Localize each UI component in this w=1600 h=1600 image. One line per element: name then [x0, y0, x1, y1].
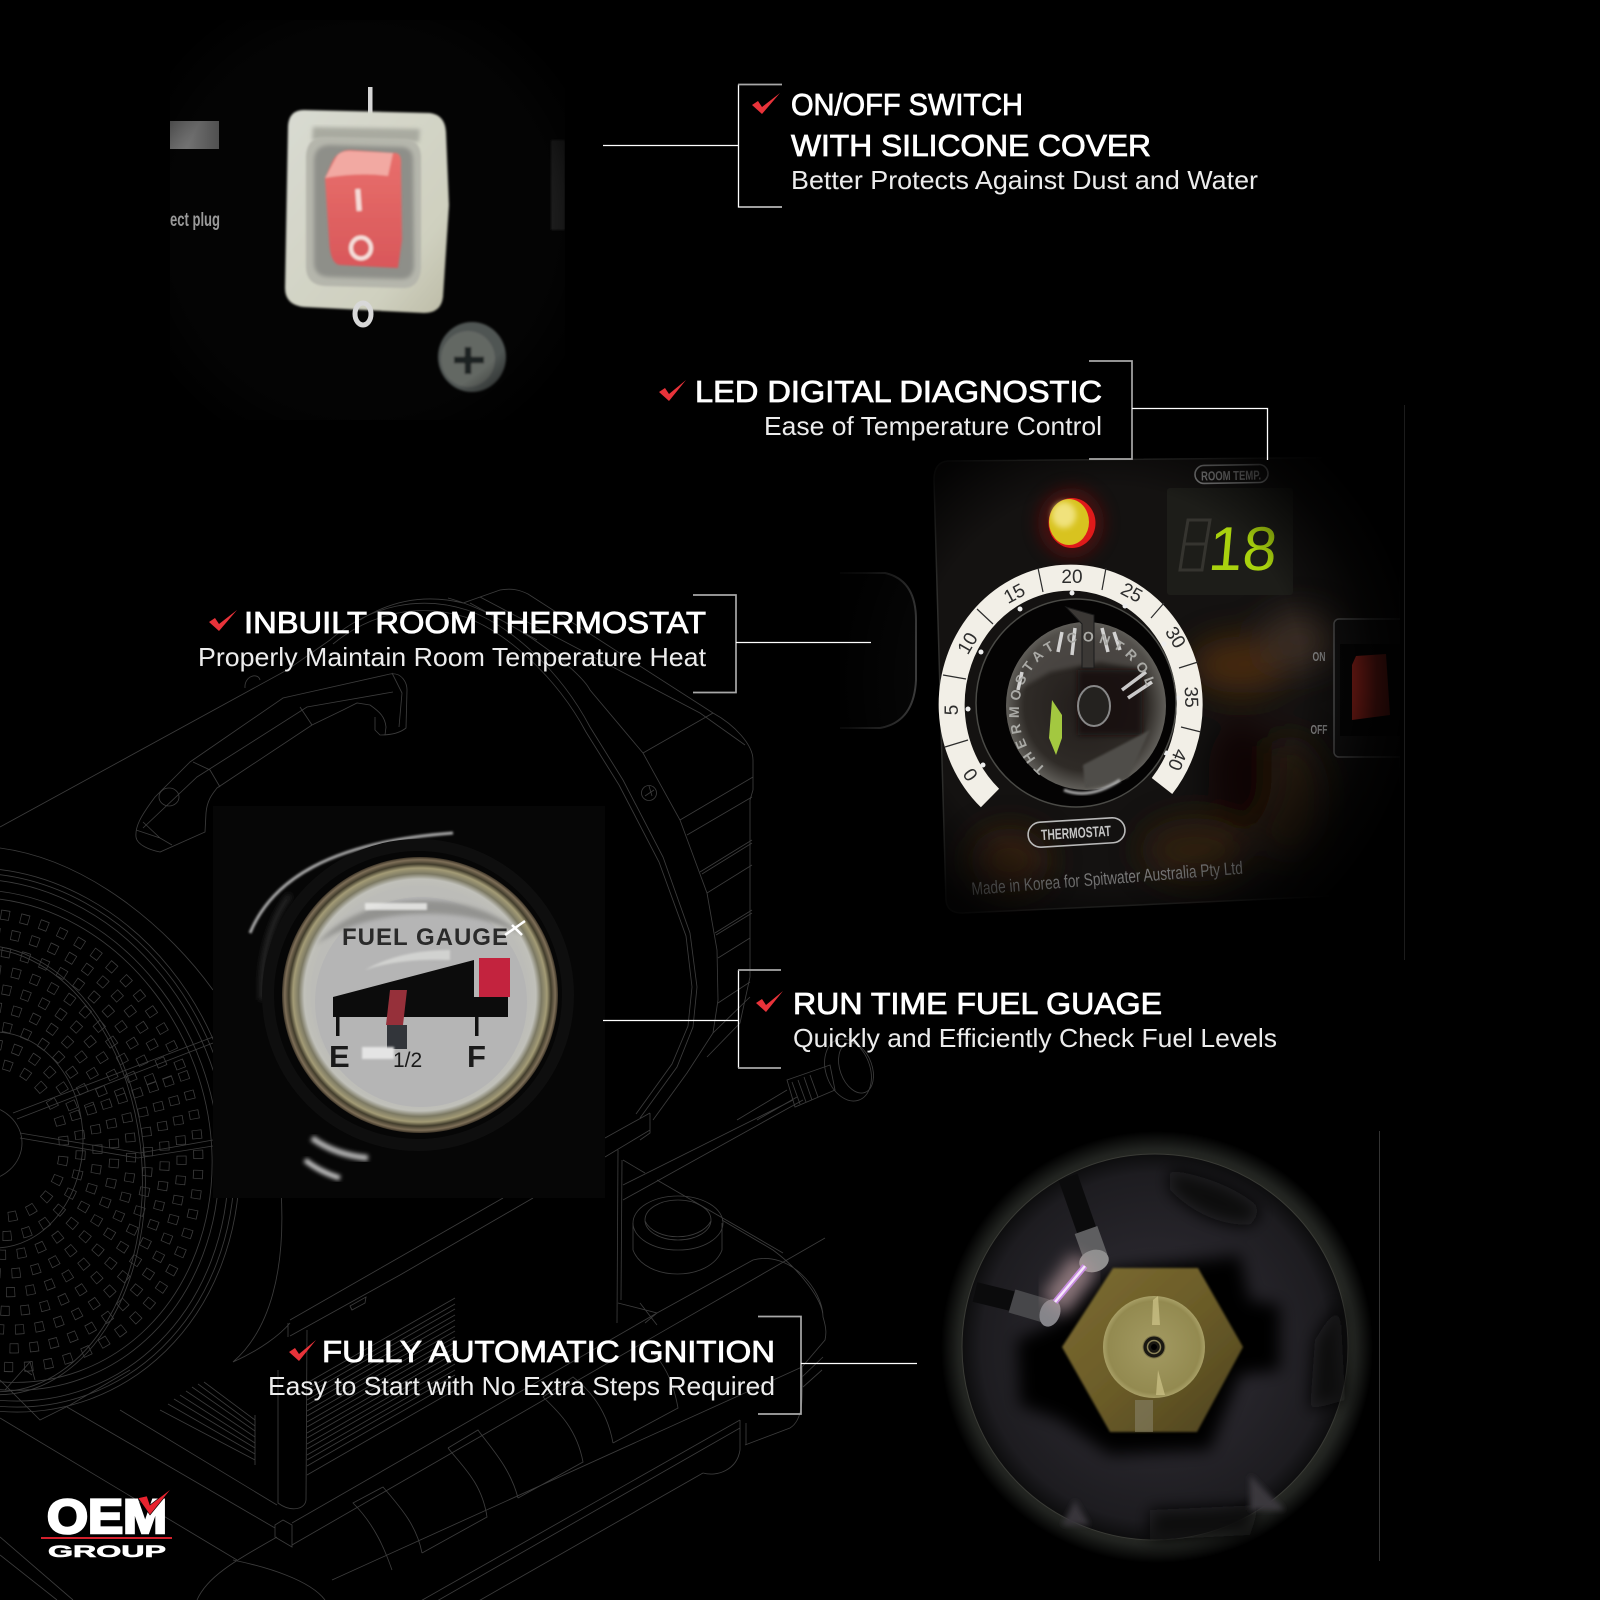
- callout: on/off switch: [603, 84, 1258, 207]
- fuel scale: [333, 960, 508, 1017]
- room temp label: [1195, 464, 1268, 484]
- grille guard wires: [0, 935, 213, 1405]
- upper electrode: [1068, 1177, 1111, 1276]
- side power switch: [1310, 618, 1392, 758]
- dial dots: [966, 590, 1180, 768]
- description: Ease of Temperature Control: [764, 411, 1102, 441]
- off mark: [355, 303, 371, 325]
- dial numbers: 40: [1163, 746, 1190, 773]
- digital display: 18: [1206, 515, 1280, 584]
- bracket stubs: [738, 970, 781, 1068]
- silicone cover: [285, 110, 449, 313]
- dial numbers: 0: [960, 764, 983, 784]
- indicator light: [1038, 488, 1104, 558]
- dial numbers: [942, 567, 1201, 784]
- brass nozzle: [1062, 1268, 1243, 1432]
- heading: INBUILT ROOM THERMOSTAT: [244, 605, 706, 640]
- callout: inbuilt room thermostat: [198, 595, 871, 692]
- leader: [758, 1316, 801, 1414]
- vents and tank: [0, 1032, 880, 1600]
- control panel: [934, 458, 1346, 913]
- thin vertical rule right of ignition: [1379, 1131, 1380, 1561]
- thermostat label: [1027, 817, 1126, 848]
- dome highlights: [248, 830, 454, 1182]
- leader: [603, 84, 782, 207]
- description: Properly Maintain Room Temperature Heat: [198, 642, 707, 672]
- heading: RUN TIME FUEL GUAGE: [793, 986, 1162, 1021]
- logo underline: [41, 1537, 172, 1539]
- logo: [41, 1488, 172, 1561]
- housing: [0, 589, 803, 1336]
- check icon: [659, 380, 686, 401]
- logo check: [138, 1488, 172, 1515]
- dial numbers: 30: [1160, 623, 1189, 652]
- gauge title: FUEL GAUGE: [342, 924, 508, 951]
- leader: [603, 970, 738, 1068]
- gauge face: [315, 897, 527, 1107]
- made in text: Made in Korea for Spitwater Australia Pty Ltd: [971, 858, 1243, 899]
- callout: fully automatic ignition: [268, 1316, 917, 1414]
- callout: LED digital diagnostic: [659, 361, 1268, 460]
- handle: [136, 673, 407, 852]
- switch mark: [368, 87, 372, 114]
- dial numbers: 20: [1061, 567, 1083, 588]
- dial tick separators: [943, 568, 1201, 747]
- knob lettering: THERMOSTAT CONTROL: [1009, 632, 1154, 776]
- spark: [1054, 1262, 1085, 1305]
- temperature dial: [942, 567, 1201, 798]
- gauge letters: E: [329, 1039, 350, 1074]
- description: Better Protects Against Dust and Water: [791, 165, 1258, 195]
- gauge bezel: [282, 857, 558, 1133]
- leader: [1089, 361, 1132, 459]
- gauge face: 1/2: [393, 1049, 422, 1072]
- left housing outline: [840, 573, 916, 728]
- leader connector: [736, 642, 871, 644]
- logo subtitle: GROUP: [48, 1542, 166, 1561]
- chrome knob: [975, 598, 1177, 808]
- printed text fragment: ect plug: [170, 210, 220, 231]
- logo wordmark: OEM: [47, 1491, 167, 1544]
- dial numbers: 5: [942, 705, 963, 715]
- heading: FULLY AUTOMATIC IGNITION: [322, 1334, 775, 1369]
- callout: run time fuel gauge: [603, 970, 1277, 1068]
- check icon: [289, 1340, 316, 1361]
- edge detail: [551, 140, 565, 230]
- line drawing of heater: [0, 589, 880, 1600]
- photo: on/off switch: [170, 87, 565, 394]
- heading: ON/OFF SWITCH: [791, 87, 1023, 122]
- grille cells: [0, 855, 261, 1425]
- knob pointer: [1066, 607, 1094, 668]
- photo: fuel gauge: [213, 830, 574, 1198]
- leader connector: [801, 1362, 917, 1364]
- thin vertical rule right of thermostat: [1404, 405, 1405, 960]
- leader connector: [1132, 408, 1268, 460]
- screw: [438, 322, 506, 392]
- room temp label: ROOM TEMP.: [1201, 467, 1261, 484]
- dial numbers: 25: [1117, 579, 1146, 608]
- dial numbers: 15: [1000, 580, 1029, 609]
- side power switch: OFF: [1310, 722, 1328, 737]
- lower electrode: [975, 1292, 1064, 1330]
- gauge face: F: [467, 1039, 486, 1074]
- background shapes: [1017, 1170, 1345, 1540]
- check icon: [752, 93, 780, 114]
- heading: LED DIGITAL DIAGNOSTIC: [695, 374, 1102, 409]
- side power switch: ON: [1312, 649, 1326, 664]
- dial numbers: 10: [954, 629, 983, 658]
- rocker button: [325, 150, 402, 268]
- description: Quickly and Efficiently Check Fuel Levels: [793, 1023, 1277, 1053]
- photo: thermostat panel: [840, 458, 1396, 913]
- photo: ignition electrode: [941, 1131, 1373, 1563]
- fan grille: [0, 799, 315, 1481]
- description: Easy to Start with No Extra Steps Required: [268, 1371, 775, 1401]
- thermostat label: THERMOSTAT: [1041, 823, 1112, 844]
- dial numbers: 35: [1180, 686, 1201, 708]
- check icon: [756, 991, 783, 1012]
- leader: [693, 595, 736, 692]
- bracket top stub: [738, 84, 782, 86]
- grey label: [170, 121, 219, 149]
- digital display: [1167, 488, 1293, 595]
- reflections: [970, 610, 1340, 892]
- check icon: [209, 610, 237, 631]
- heading line two: WITH SILICONE COVER: [791, 128, 1151, 163]
